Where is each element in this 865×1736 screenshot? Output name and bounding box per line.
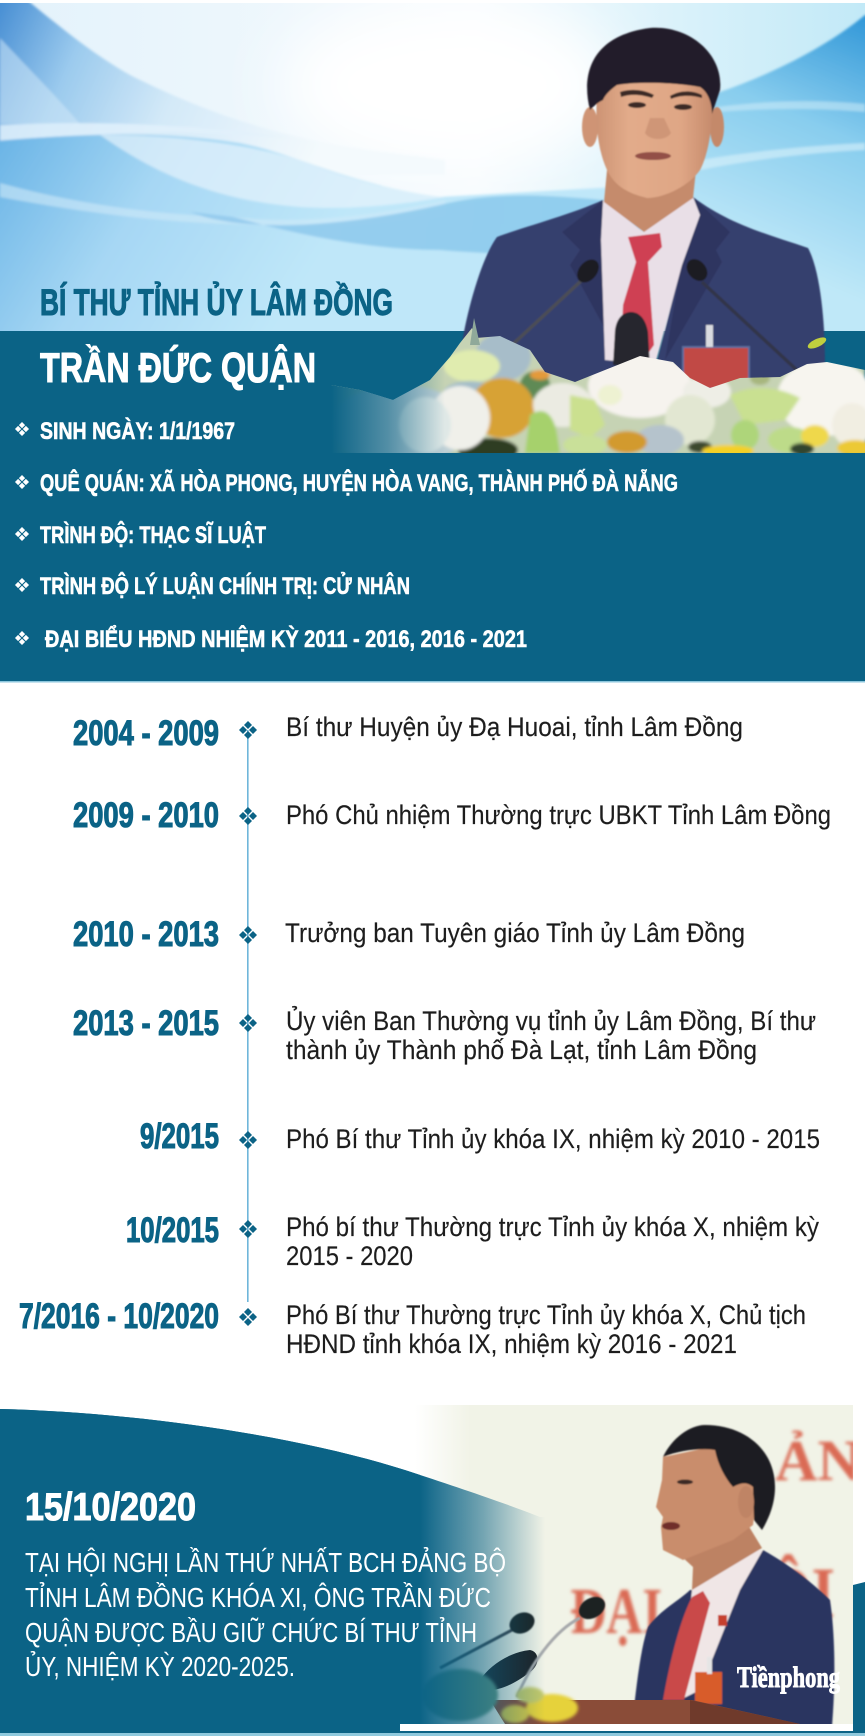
flower arrangement: [332, 328, 865, 453]
lapel shade left: [562, 200, 622, 360]
entry 2004-2009: 2004 - 2009: [73, 714, 219, 753]
ear: [738, 1486, 754, 1518]
entry 2009-2010: 2009 - 2010: [73, 796, 219, 835]
blurred hall lettering: ĐẠI: [570, 1575, 662, 1648]
open mouth: [662, 1522, 680, 1530]
entry 2004-2009: Bí thư Huyện ủy Đạ Huoai, tỉnh Lâm Đồng: [286, 712, 743, 742]
right ear: [710, 107, 724, 147]
portrait: speaker at lectern: [462, 28, 825, 390]
callout paragraph: [25, 1546, 506, 1682]
right microphone: [682, 255, 800, 373]
eye: [677, 1480, 693, 1484]
callout paragraph: TỈNH LÂM ĐỒNG KHÓA XI, ÔNG TRẦN ĐỨC: [25, 1581, 491, 1613]
bullet: education: TRÌNH ĐỘ: THẠC SĨ LUẬT: [40, 521, 266, 549]
hair: [663, 1425, 775, 1530]
callout paragraph: TẠI HỘI NGHỊ LẦN THỨ NHẤT BCH ĐẢNG BỘ: [25, 1546, 506, 1578]
teal curved panel with fade: [0, 1409, 546, 1733]
top dark teal information panel: [0, 331, 865, 681]
blurred hall lettering: [570, 1428, 860, 1648]
subtitle: BÍ THƯ TỈNH ỦY LÂM ĐỒNG: [40, 281, 393, 323]
ears: [582, 107, 598, 147]
callout date: 15/10/2020: [25, 1486, 196, 1529]
right teal strip: [853, 1582, 865, 1733]
nose shade: [645, 118, 671, 139]
entry 2010-2013: Trưởng ban Tuyên giáo Tỉnh ủy Lâm Đồng: [285, 918, 745, 948]
middle microphone: [517, 1592, 609, 1697]
entry 10/2015: 2015 - 2020: [286, 1241, 413, 1271]
entry 2013-2015: thành ủy Thành phố Đà Lạt, tỉnh Lâm Đồng: [286, 1035, 757, 1065]
entry 2013-2015: [73, 1004, 816, 1065]
entry 2010-2013: [73, 915, 745, 954]
entry 7/2016-10/2020: 7/2016 - 10/2020: [19, 1297, 219, 1336]
neck: [604, 170, 696, 232]
bio bullet list: [15, 417, 678, 653]
panel bottom light line: [0, 681, 865, 682]
header background with blue waves: [0, 0, 865, 335]
neck: [684, 1527, 762, 1590]
central microphone: [613, 312, 650, 368]
lower dark microphone: [480, 1650, 538, 1690]
hair: [587, 28, 720, 114]
entry 7/2016-10/2020: HĐND tỉnh khóa IX, nhiệm kỳ 2016 - 2021: [286, 1329, 737, 1359]
entry 2004-2009: [73, 712, 743, 753]
entry 10/2015: [126, 1211, 819, 1271]
left microphone: [512, 255, 603, 345]
shirt: [680, 1550, 763, 1700]
bullet: political theory: [15, 571, 410, 600]
entry 2010-2013: 2010 - 2013: [73, 915, 219, 954]
entry 9/2015: 9/2015: [140, 1117, 219, 1156]
lapel shade right: [665, 197, 730, 360]
entry 2013-2015: 2013 - 2015: [73, 1004, 219, 1043]
bullet: political theory: TRÌNH ĐỘ LÝ LUẬN CHÍNH TRỊ: CỬ NHÂN: [40, 571, 410, 600]
entry 7/2016-10/2020: [19, 1297, 806, 1359]
blurred hall lettering: ỘI: [765, 1553, 835, 1633]
mouth: [635, 152, 671, 160]
podium shadow: [690, 1700, 800, 1724]
face: [656, 1445, 760, 1560]
timeline axis: [247, 730, 249, 1302]
wooden podium: [490, 1700, 800, 1724]
title name: TRẦN ĐỨC QUẬN: [40, 343, 316, 391]
tie: [622, 233, 662, 365]
bottom photo: speaking at podium: [415, 1405, 860, 1726]
bullet: delegate terms: ĐẠI BIỂU HĐND NHIỆM KỲ 2011 - 2016, 2016 - 2021: [45, 625, 527, 653]
entry 10/2015: 10/2015: [126, 1211, 219, 1250]
entry 2013-2015: Ủy viên Ban Thường vụ tỉnh ủy Lâm Đồng, Bí thư: [286, 1004, 816, 1036]
career timeline: [19, 712, 831, 1359]
chest badge: [695, 1657, 722, 1704]
blurred hall lettering: ẢN: [775, 1428, 860, 1493]
entry 7/2016-10/2020: Phó Bí thư Thường trực Tỉnh ủy khóa X, Chủ tịch: [286, 1300, 806, 1330]
callout paragraph: QUẬN ĐƯỢC BẦU GIỮ CHỨC BÍ THƯ TỈNH: [25, 1616, 477, 1648]
entry 2009-2010: [73, 796, 831, 835]
suit: [632, 1550, 834, 1726]
yellow leaf at right edge: [806, 335, 828, 351]
suit left: [462, 200, 625, 385]
entry 9/2015: [140, 1117, 820, 1156]
brow right: [670, 91, 702, 99]
shirt: [601, 197, 700, 365]
solid teal area of curved panel: [0, 1409, 420, 1733]
tie: [663, 1591, 710, 1700]
green flowers: [422, 1669, 498, 1721]
bottom teal strip: [0, 1731, 865, 1733]
bottom light line: [0, 1733, 865, 1736]
suit right: [650, 197, 825, 390]
lapel pin: [718, 1615, 727, 1626]
name badge: [683, 325, 749, 389]
flower spike leaf: [470, 318, 480, 345]
bullet: birth date: SINH NGÀY: 1/1/1967: [40, 417, 235, 445]
bullet: education: [15, 521, 266, 549]
left microphone: [440, 1608, 538, 1668]
yellow flowers: [501, 1687, 578, 1723]
eyes: [628, 102, 646, 108]
speaker figure: [632, 1425, 834, 1726]
face: [596, 76, 712, 198]
eye right: [674, 104, 692, 110]
entry 10/2015: Phó bí thư Thường trực Tỉnh ủy khóa X, nhiệm kỳ: [286, 1212, 819, 1242]
callout paragraph: ỦY, NHIỆM KỲ 2020-2025.: [25, 1650, 295, 1682]
brow left: [620, 90, 654, 98]
